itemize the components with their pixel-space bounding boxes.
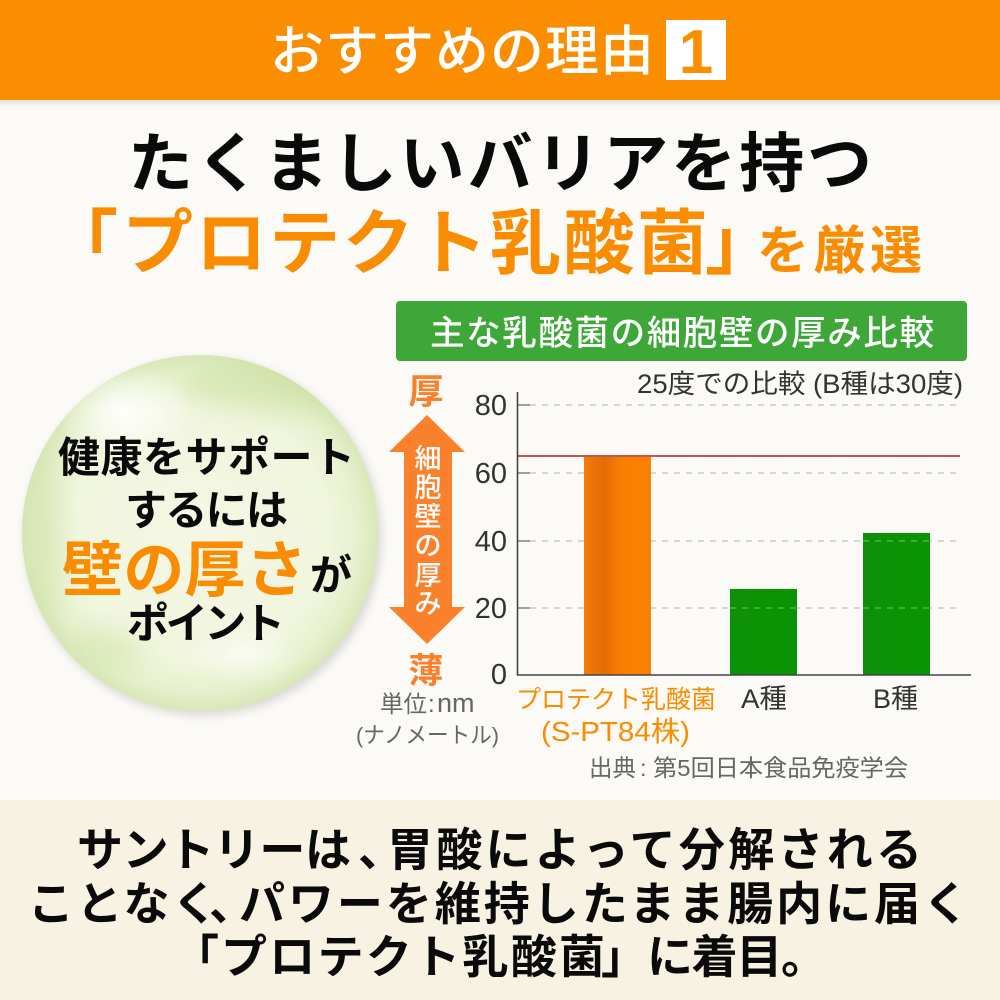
gridlines bbox=[530, 405, 960, 608]
y axis labels: 60 bbox=[475, 458, 507, 490]
bottom message: 胃酸によって分解される bbox=[387, 814, 922, 880]
heading highlighted term: 」 bbox=[705, 187, 776, 289]
bottom message: 、 bbox=[209, 868, 255, 934]
y axis labels: 40 bbox=[475, 526, 507, 558]
source note: 出典 bbox=[589, 755, 636, 781]
y axis labels: 80 bbox=[475, 390, 507, 422]
bottom message: パワーを維持したまま腸内に届く bbox=[239, 868, 969, 934]
bottom band bbox=[0, 800, 1000, 1000]
bar: type B bbox=[863, 533, 930, 675]
heading highlighted term: 「 bbox=[47, 187, 118, 289]
callout text: ポイント bbox=[127, 590, 285, 651]
heading suffix: を厳選 bbox=[757, 209, 922, 284]
arrow label: 厚 bbox=[414, 554, 442, 593]
bar: protect lactobacillus bbox=[584, 456, 651, 675]
heading highlighted term: プロテクト乳酸菌 bbox=[122, 187, 708, 289]
arrow label: 細 bbox=[414, 437, 442, 476]
callout text bbox=[58, 424, 355, 651]
chart title bar: 主な乳酸菌の細胞壁の厚み比較 bbox=[430, 305, 934, 355]
x axis label: B: B種 bbox=[873, 684, 918, 714]
double arrow bbox=[389, 415, 465, 644]
bottom message: プロテクト乳酸菌 bbox=[221, 921, 605, 987]
arrow label: み bbox=[414, 582, 442, 621]
source note: : bbox=[640, 755, 647, 781]
bottom message: 」 bbox=[601, 921, 647, 987]
header band bbox=[0, 0, 1000, 107]
number badge bbox=[666, 18, 726, 87]
bottom message: に着目。 bbox=[647, 921, 827, 987]
header title: おすすめの理由 bbox=[270, 7, 654, 86]
bar: type A bbox=[730, 589, 797, 675]
x axis label: protect: プロテクト乳酸菌 bbox=[516, 686, 716, 714]
reference line bbox=[518, 455, 960, 457]
thick label: 厚 bbox=[408, 364, 444, 415]
bottom message bbox=[28, 814, 969, 987]
unit label: 単位 bbox=[380, 691, 427, 717]
y axis labels: 0 bbox=[491, 659, 507, 691]
bar chart bbox=[475, 390, 971, 747]
arrow label: の bbox=[414, 524, 442, 563]
arrow label: 胞 bbox=[414, 466, 442, 505]
main heading: たくましいバリアを持つ bbox=[128, 111, 872, 205]
chart condition note: 25度での比較 (B種は30度) bbox=[637, 369, 963, 399]
x axis label: A: A種 bbox=[741, 684, 787, 714]
callout text: 壁の厚さ bbox=[62, 520, 307, 609]
source note: 第5回日本食品免疫学会 bbox=[653, 755, 908, 781]
callout text: 健康をサポート bbox=[58, 424, 355, 485]
bottom message: サントリーは bbox=[77, 814, 351, 880]
bottom message: ことなく bbox=[28, 868, 218, 934]
main heading bbox=[47, 111, 922, 289]
thin label: 薄 bbox=[408, 643, 444, 694]
x axis label: protect: (S-PT84株) bbox=[541, 716, 690, 747]
unit label: nm bbox=[437, 688, 475, 718]
number badge: 1 bbox=[679, 18, 713, 87]
bottom message: 、 bbox=[358, 814, 404, 880]
bottom message: 「 bbox=[173, 921, 219, 987]
thickness scale bbox=[356, 364, 499, 748]
y axis labels bbox=[475, 390, 507, 691]
x axis label: protect bbox=[516, 686, 716, 747]
unit label: (ナノメートル) bbox=[356, 723, 499, 748]
callout text: が bbox=[310, 542, 352, 603]
callout text: するには bbox=[125, 477, 288, 538]
y axis labels: 20 bbox=[475, 593, 507, 625]
arrow label: 壁 bbox=[414, 495, 442, 534]
circle callout bbox=[22, 355, 381, 715]
unit label: : bbox=[428, 691, 435, 718]
unit label bbox=[356, 688, 499, 748]
axes bbox=[518, 392, 971, 675]
